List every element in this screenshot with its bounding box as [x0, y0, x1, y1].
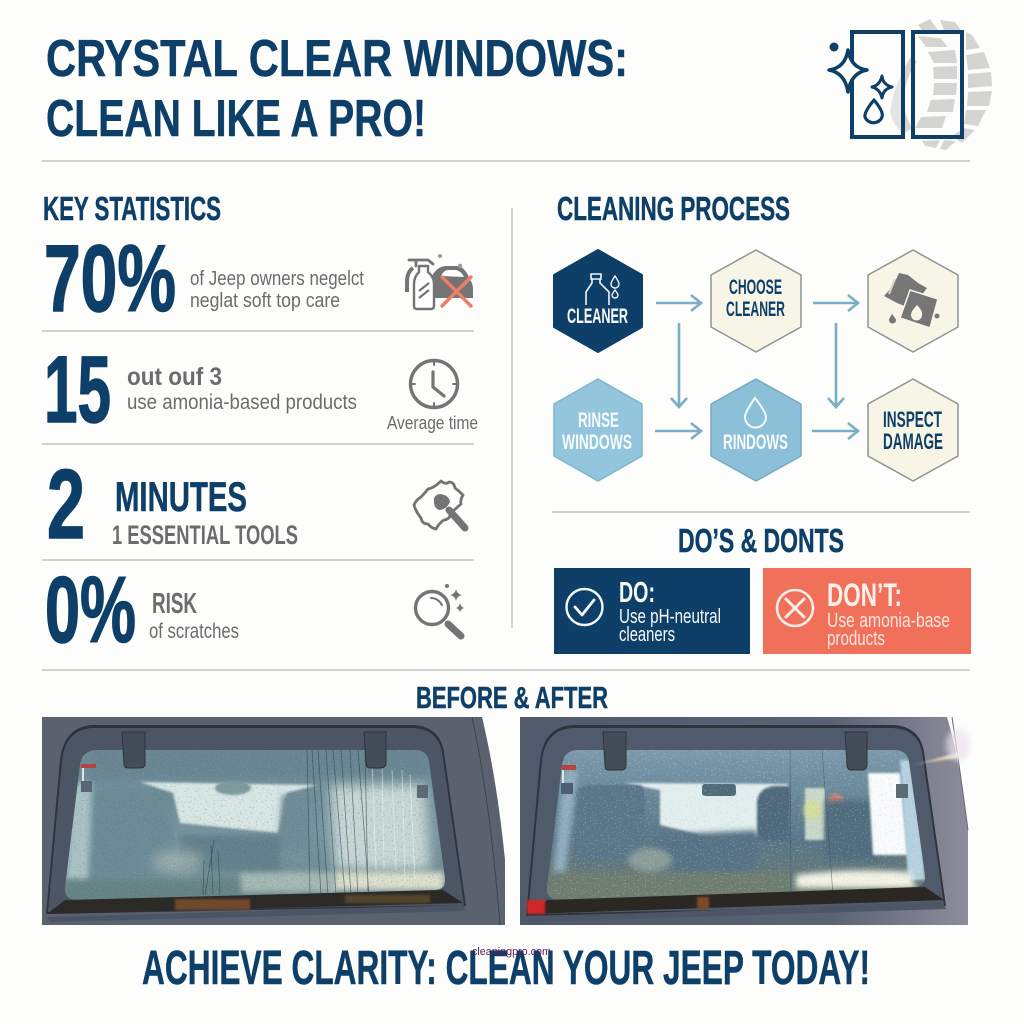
card: do: DO:: [619, 577, 655, 609]
stat: 2 minutes: 1 ESSENTIAL TOOLS: [112, 520, 298, 550]
hexagon: inspect damage: INSPECT: [883, 407, 942, 432]
card: dont: products: [827, 628, 885, 650]
hexagon: cleaner: CLEANER: [567, 305, 628, 328]
card: dont: DON’T:: [827, 577, 902, 613]
title: [46, 30, 628, 148]
stat: 0 percent: RISK: [152, 588, 197, 620]
stat: 70 percent: 70%: [44, 226, 176, 332]
panel: cleaning process: [554, 190, 958, 481]
heading: key statistics: KEY STATISTICS: [43, 190, 221, 227]
heading: cleaning process: CLEANING PROCESS: [557, 190, 790, 227]
card: do: Use pH-neutral: [619, 606, 721, 628]
stat: 0 percent: 0%: [45, 557, 136, 662]
hexagon: choose cleaner: CHOOSE: [729, 276, 782, 299]
arrow: down to rindows: [671, 323, 687, 407]
arrow: cleaner to choose cleaner: [656, 295, 701, 311]
hexagon: choose cleaner: CLEANER: [726, 298, 785, 321]
icon: clock with average time: [387, 360, 478, 433]
arrow: rindows to inspect damage: [812, 423, 858, 439]
arrow: choose cleaner to cloth: [813, 295, 858, 311]
hexagon: cleaner: [554, 250, 642, 352]
title: CLEAN LIKE A PRO!: [46, 90, 426, 148]
title: CRYSTAL CLEAR WINDOWS:: [46, 30, 628, 88]
card: do: cleaners: [619, 624, 675, 646]
icon: magnifying glass with sparkles: [416, 584, 464, 636]
watermark: cleaningpro.com: [472, 946, 551, 958]
heading: dos and donts: DO’S & DONTS: [678, 522, 844, 559]
photo: after, clear jeep window: [520, 717, 970, 925]
hexagon: inspect damage: DAMAGE: [883, 429, 943, 454]
stat: 15 out of 3: [44, 337, 357, 443]
center divider: [511, 208, 513, 628]
hexagon: choose cleaner: [711, 250, 801, 352]
stat: 2 minutes: MINUTES: [115, 473, 247, 520]
heading: before and after: BEFORE & AFTER: [416, 680, 608, 715]
hexagon: rinse windows: WINDOWS: [562, 431, 632, 454]
card: dont: [763, 568, 971, 654]
stat: 15 out of 3: use amonia-based products: [127, 391, 357, 414]
photo: before, streaked jeep window: [42, 717, 505, 925]
icon: cloth and tool: [414, 481, 465, 529]
stat: 2 minutes: [47, 449, 298, 559]
hexagon: rinse windows: RINSE: [578, 409, 619, 432]
stat: 15 out of 3: 15: [44, 337, 111, 443]
hexagon: cloth icon: [868, 250, 958, 352]
icon: grey tire tread: [890, 19, 992, 150]
icon: windows with sparkles over tire: [829, 19, 992, 150]
hexagon: rindows: [711, 379, 801, 481]
hexagon: rindows: RINDOWS: [723, 431, 788, 454]
stat: 0 percent: of scratches: [149, 620, 239, 643]
card: do: [554, 568, 750, 654]
header divider: [42, 160, 970, 162]
icon: clock with average time: Average time: [387, 413, 478, 433]
panel: dos and donts: [554, 522, 971, 654]
arrow: down to inspect damage: [828, 323, 844, 407]
hexagon: rinse windows: [554, 379, 642, 481]
arrow: rinse windows to rindows: [655, 423, 701, 439]
card: dont: Use amonia-base: [827, 610, 950, 632]
icon: spray bottle and car crossed out: [407, 254, 473, 309]
stat: 15 out of 3: out ouf 3: [127, 363, 222, 391]
stat: 70 percent: of Jeep owners negelct: [190, 268, 364, 290]
hexagon: inspect damage: [868, 379, 958, 481]
stat: 70 percent: neglat soft top care: [190, 290, 340, 312]
stat: 70 percent: [44, 226, 364, 332]
stat: 2 minutes: 2: [47, 449, 85, 559]
panel: key statistics: [42, 190, 478, 662]
